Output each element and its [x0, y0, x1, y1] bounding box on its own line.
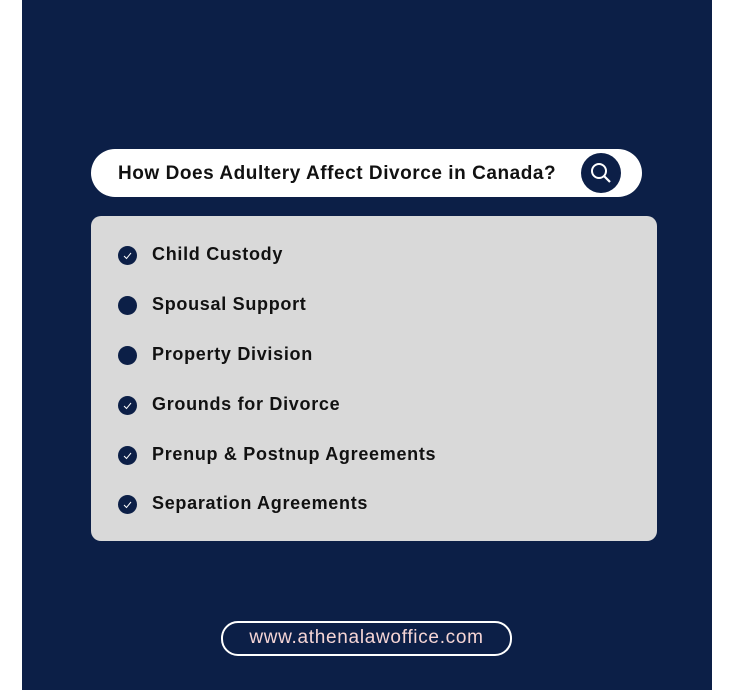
- item: child custody: Child Custody: [152, 244, 283, 264]
- url pill: www.athenalawoffice.com: [249, 627, 484, 648]
- url pill: [221, 621, 512, 656]
- icon: search: [581, 153, 621, 193]
- item: separation: Separation Agreements: [152, 493, 368, 513]
- item: grounds: Grounds for Divorce: [152, 394, 340, 414]
- item: spousal support: Spousal Support: [152, 294, 306, 314]
- title: How Does Adultery Affect Divorce in Canada?: [118, 163, 556, 184]
- item: prenup: Prenup & Postnup Agreements: [152, 444, 436, 464]
- search bar: [91, 149, 642, 197]
- item: property division: Property Division: [152, 344, 313, 364]
- panel: list: [91, 216, 657, 541]
